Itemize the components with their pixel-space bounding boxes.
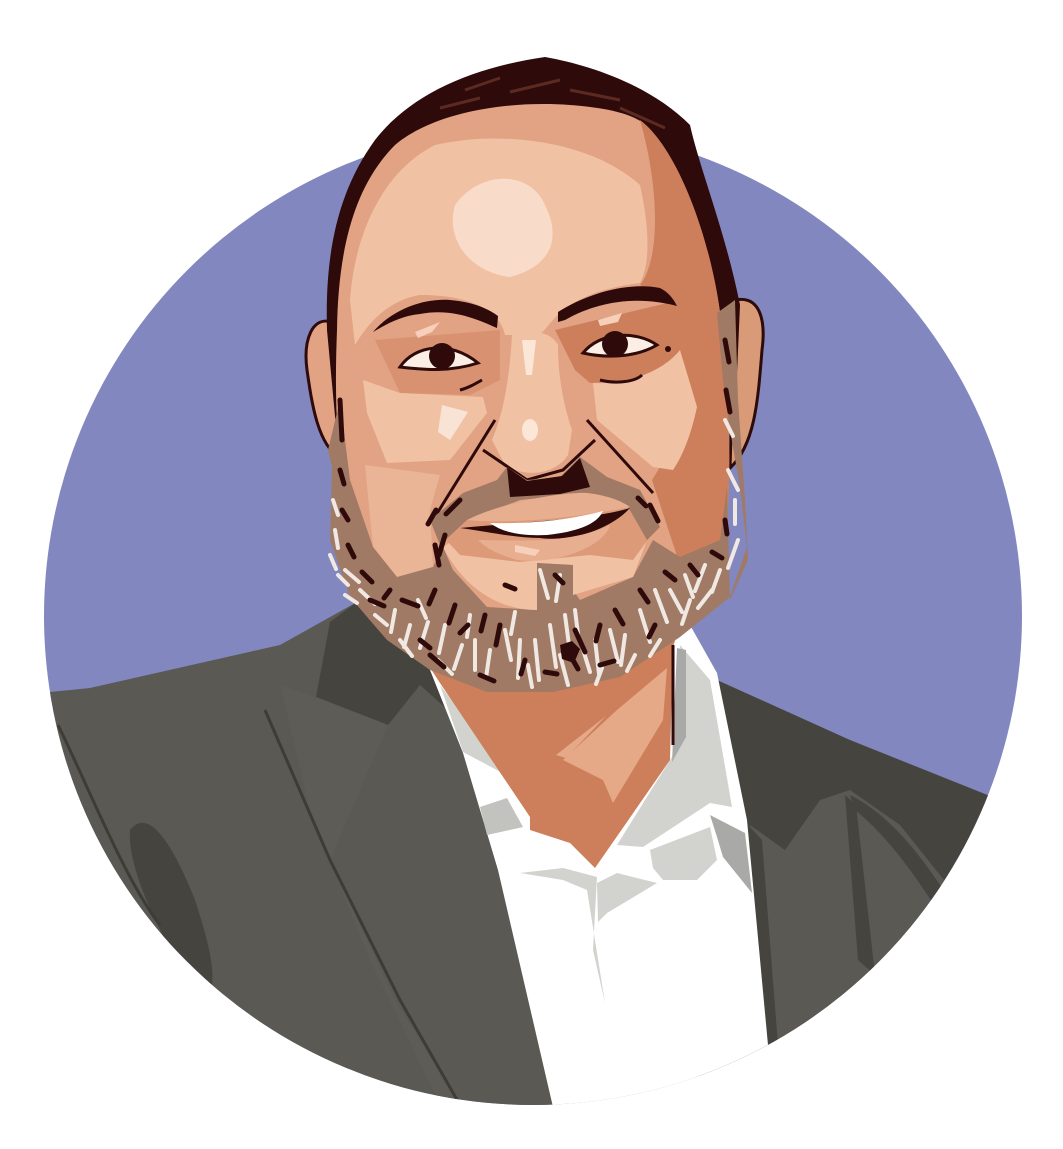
ear: left	[306, 321, 340, 458]
jacket: sleeve shadow	[130, 823, 212, 985]
upper lip	[467, 493, 630, 521]
cheek: left	[363, 380, 487, 463]
beard	[328, 300, 748, 692]
nose outline	[433, 420, 653, 520]
forehead light	[350, 138, 648, 345]
mouth: line	[460, 508, 630, 539]
eye: left	[400, 348, 478, 370]
cheek: right	[593, 350, 697, 470]
jacket: lapel fold	[436, 1095, 456, 1099]
beard: goatee	[537, 563, 573, 612]
jacket and shirt	[30, 602, 1000, 1130]
face base	[336, 104, 729, 665]
eye: right	[583, 335, 657, 356]
forehead sheen	[453, 179, 553, 277]
neck highlight	[563, 668, 667, 803]
beard: dark patch	[560, 641, 580, 663]
eyebrow: right	[558, 286, 677, 322]
jacket: left side	[30, 602, 560, 1120]
nose	[492, 332, 572, 473]
shirt: left collar shade	[440, 685, 500, 772]
head	[306, 57, 763, 692]
jacket: lapel shadow	[316, 602, 450, 725]
beard: dark strands	[340, 340, 730, 681]
ear: right	[730, 299, 763, 468]
nose highlights	[522, 340, 536, 375]
jacket: right panel	[750, 790, 944, 1042]
beard: white strands	[330, 420, 738, 687]
background circle	[44, 127, 1022, 1105]
neck	[432, 640, 676, 868]
face: right shadow	[640, 120, 729, 565]
beard: mustache	[430, 457, 660, 545]
mouth: teeth	[490, 511, 603, 535]
eyelid highlights	[415, 322, 440, 338]
eye marks	[460, 375, 642, 390]
shirt: right collar	[617, 645, 732, 847]
hair: highlights	[440, 78, 665, 128]
eyebrow: left	[373, 300, 498, 332]
shirt	[430, 625, 780, 1120]
cheek: lower left	[365, 465, 440, 577]
chin and lip base	[443, 510, 653, 610]
hair	[327, 57, 740, 470]
jacket: right side	[698, 680, 988, 1076]
lower lip	[478, 525, 610, 561]
